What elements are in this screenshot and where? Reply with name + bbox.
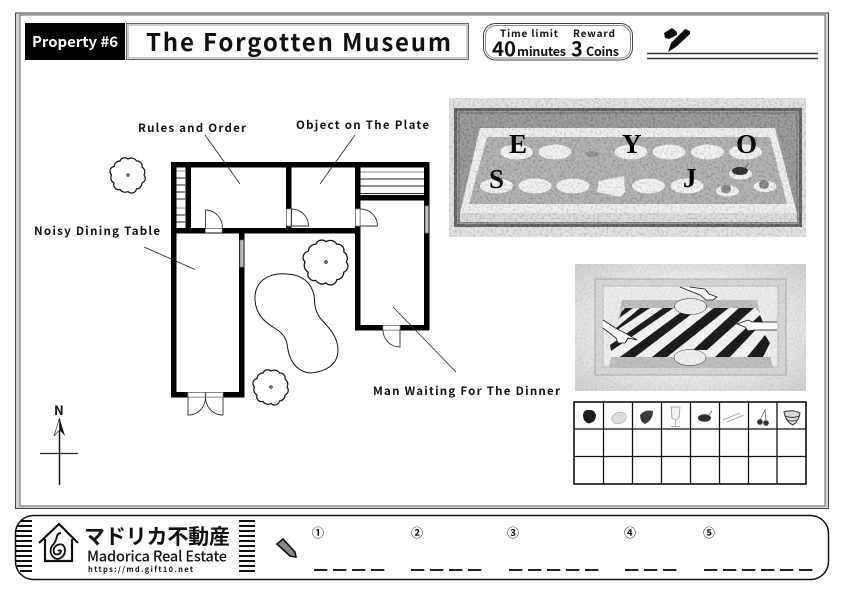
time limit and reward: Reward	[573, 25, 615, 40]
label: Object on The Plate: Object on The Plate	[296, 117, 429, 133]
grid table of objects	[574, 402, 806, 484]
door swings	[188, 209, 400, 415]
company name: https://md.gift10.net	[88, 564, 194, 575]
tree courtyard	[303, 240, 348, 285]
icon: bowl	[784, 411, 800, 425]
plates	[674, 298, 706, 314]
bottom answer bar	[16, 516, 828, 580]
label: Noisy Dining Table	[34, 223, 195, 270]
walls	[171, 162, 430, 398]
property number badge	[25, 23, 125, 60]
answer 1: ①	[312, 524, 324, 541]
time limit and reward: minutes	[517, 41, 566, 60]
time limit and reward	[484, 24, 632, 62]
time limit and reward: Time limit	[500, 25, 559, 40]
north compass	[40, 400, 78, 485]
icon: cherries	[757, 410, 769, 426]
painting: plates with letters	[449, 98, 806, 237]
time limit and reward: Coins	[586, 41, 619, 60]
property number badge: Property #6	[32, 31, 118, 52]
painting: striped carpet with pointing hands	[575, 264, 806, 391]
letters: Y	[622, 129, 642, 159]
label: Object on The Plate	[296, 117, 429, 184]
letters: J	[683, 163, 696, 193]
icon: grapes	[698, 411, 712, 422]
tree north-west	[110, 158, 145, 193]
left stairs	[176, 168, 185, 228]
letters: S	[489, 164, 504, 194]
right stripes	[239, 521, 255, 571]
answer 2: ②	[411, 524, 423, 541]
label: Rules and Order	[138, 120, 247, 184]
icon: strawberry	[640, 410, 653, 424]
letters: E	[509, 129, 527, 159]
company name	[84, 521, 230, 575]
time limit and reward: 3	[571, 33, 583, 62]
label: Man Waiting For The Dinner	[373, 307, 561, 399]
left stripes	[16, 521, 32, 571]
label: Noisy Dining Table: Noisy Dining Table	[34, 223, 160, 239]
answer 5: ⑤	[703, 524, 715, 541]
answer 3: ③	[507, 524, 519, 541]
label: Man Waiting For The Dinner: Man Waiting For The Dinner	[373, 383, 561, 399]
answer 3	[507, 524, 599, 570]
icon: wine glass	[671, 407, 680, 426]
title: The Forgotten Museum	[146, 23, 451, 58]
carpet stripes	[610, 307, 770, 357]
time limit and reward: 40	[492, 33, 516, 62]
right stairs	[360, 172, 424, 194]
icon: pencil	[277, 539, 296, 557]
icon: apple	[583, 410, 596, 424]
plates row two	[480, 168, 776, 197]
answer 4: ④	[624, 524, 636, 541]
door openings	[188, 209, 400, 397]
company name: マドリカ不動産	[84, 521, 230, 551]
logo: house with spiral	[39, 524, 78, 561]
icon: chopsticks	[723, 413, 744, 422]
icon: lemon	[610, 410, 628, 426]
floor plan	[110, 158, 430, 415]
pond	[255, 274, 338, 373]
table grid	[574, 402, 806, 484]
answer 2	[411, 524, 482, 570]
tree south	[253, 370, 288, 405]
north compass: N	[54, 400, 64, 419]
pointing hands	[603, 287, 777, 343]
label: Rules and Order: Rules and Order	[138, 120, 247, 136]
name entry line with pen icon	[647, 28, 818, 58]
answer 5	[703, 524, 813, 570]
letters: O	[736, 129, 757, 159]
letters	[489, 129, 757, 194]
company name: Madorica Real Estate	[87, 546, 227, 566]
answer 4	[624, 524, 677, 570]
foods on small plates	[721, 163, 769, 194]
windows	[240, 206, 428, 267]
answer 1	[312, 524, 385, 570]
plates row one	[500, 144, 762, 160]
